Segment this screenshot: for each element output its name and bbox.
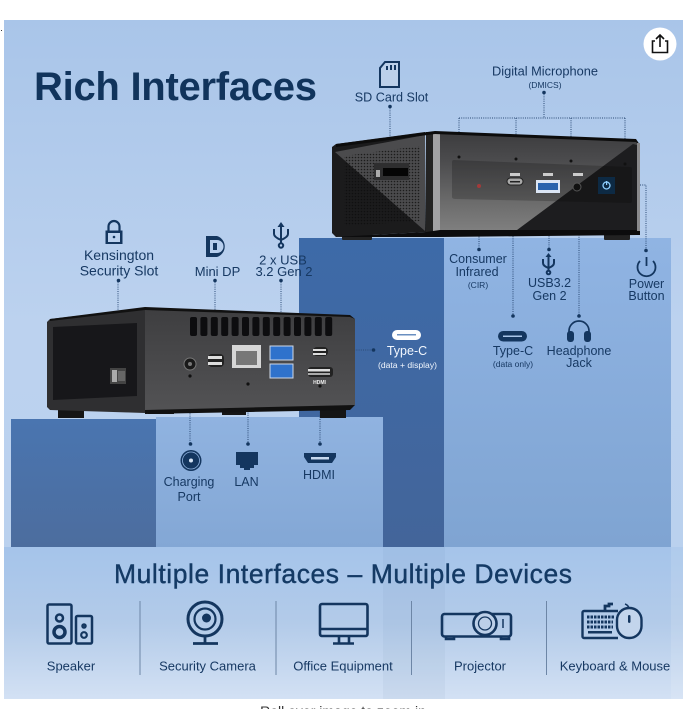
icon: security camera xyxy=(188,602,222,644)
label: Power Button: Power xyxy=(629,277,664,291)
stray mark xyxy=(1,30,2,31)
lower device ports xyxy=(184,345,333,388)
lower device top edge xyxy=(50,307,355,321)
icon: Type-C data and display xyxy=(330,330,421,352)
lower device rear face xyxy=(145,308,355,412)
icon: projector xyxy=(442,612,511,639)
label: Power Button: Button xyxy=(628,289,665,303)
icon: LAN xyxy=(236,442,258,470)
lower device left face xyxy=(47,308,145,413)
top device bottom strip xyxy=(334,230,640,237)
label: HDMI: HDMI xyxy=(303,468,335,482)
top device top edge xyxy=(336,131,640,147)
label: USB3.2 Gen 2: Gen 2 xyxy=(532,289,567,303)
top device corner dark strip xyxy=(426,132,434,236)
icon: SD card xyxy=(380,62,399,87)
top device ports xyxy=(458,156,626,194)
label: Power Button xyxy=(628,277,665,303)
top device front face xyxy=(440,132,640,230)
label: Consumer Infrared: Infrared xyxy=(455,265,499,279)
lower device bottom strip xyxy=(145,405,355,414)
left pedestal light face xyxy=(156,417,383,547)
label: Type-C data only: (data only) xyxy=(493,359,533,369)
top device left face highlight xyxy=(335,135,425,231)
label: Keyboard and Mouse: Keyboard & Mouse xyxy=(560,658,670,674)
icon: USB xyxy=(274,222,288,248)
top device left face xyxy=(332,132,426,237)
label: USB3.2 Gen 2 xyxy=(528,276,571,303)
label: Headphone Jack: Headphone xyxy=(547,344,611,358)
label: Headphone Jack xyxy=(547,344,611,370)
title: Rich Interfaces xyxy=(34,65,317,109)
label: Office Equipment: Office Equipment xyxy=(293,658,393,674)
top device port panel xyxy=(452,160,632,203)
right pedestal dark face xyxy=(299,238,444,547)
SD slot xyxy=(374,163,409,180)
band side strip xyxy=(671,547,683,699)
icon: monitor xyxy=(320,604,368,644)
bottom band xyxy=(4,547,683,699)
top device dark diagonal xyxy=(517,144,640,230)
label: Type-C data only: Type-C xyxy=(493,344,533,358)
label: Charging Port: Charging xyxy=(164,475,214,489)
label: USB3.2 Gen 2: USB3.2 xyxy=(528,276,571,290)
icon: HDMI xyxy=(304,442,336,463)
label: Consumer Infrared xyxy=(449,248,507,290)
left pedestal dark face xyxy=(11,419,156,547)
label: Charging Port xyxy=(164,475,214,504)
device: lower mini PC xyxy=(47,307,355,418)
bottom heading: Multiple Interfaces – Multiple Devices xyxy=(114,559,572,589)
label: Consumer Infrared: (CIR) xyxy=(468,280,488,290)
device dividers xyxy=(140,601,546,675)
label: Security Camera: Security Camera xyxy=(159,658,257,674)
top device feet xyxy=(342,234,630,240)
label: 2 x USB 3.2 Gen 2: 3.2 Gen 2 xyxy=(255,264,313,279)
icon: Type-C data only xyxy=(498,314,527,342)
label: LAN: LAN xyxy=(234,475,259,489)
label: 2 x USB 3.2 Gen 2 xyxy=(255,252,313,282)
label: Digital Microphone: Digital Microphone xyxy=(492,64,598,78)
label: Kensington Security Slot: Security Slot xyxy=(80,262,158,278)
label: Charging Port: Port xyxy=(178,490,201,504)
top device right rim xyxy=(637,143,640,231)
lower device vents xyxy=(190,317,332,336)
label: Consumer Infrared: Consumer xyxy=(449,252,507,266)
icon: USB 3.2 xyxy=(543,248,554,274)
label: Digital Microphone xyxy=(492,64,598,94)
label: SD Card Slot: SD Card Slot xyxy=(355,90,429,104)
label: Projector: Projector xyxy=(454,658,507,674)
label: Headphone Jack: Jack xyxy=(566,356,593,370)
label: Kensington Security Slot: Kensington xyxy=(84,247,154,263)
label: 2 x USB 3.2 Gen 2: 2 x USB xyxy=(259,252,307,268)
lower device latch xyxy=(110,368,126,384)
label: Speaker: Speaker xyxy=(47,658,96,674)
label: Type-C data and display: Type-C xyxy=(387,344,427,358)
lower device left panel xyxy=(53,323,137,400)
callout lines for lower device xyxy=(118,280,320,444)
label: Digital Microphone: (DMICS) xyxy=(528,80,562,90)
icon: charging port xyxy=(180,442,202,471)
icon: headphones xyxy=(567,314,591,342)
band overlap tone xyxy=(383,547,445,699)
label: Mini DP: Mini DP xyxy=(195,264,240,279)
lower device ports: HDMI xyxy=(313,380,326,386)
top device silver pillar xyxy=(433,132,440,235)
right pedestal light face xyxy=(444,238,671,547)
icon: power xyxy=(638,249,656,276)
icon: keyboard and mouse xyxy=(582,604,642,638)
icon: Kensington lock xyxy=(106,221,122,244)
icon: speaker xyxy=(48,604,92,644)
device: top mini PC xyxy=(332,131,640,240)
share button xyxy=(644,28,676,60)
lower device feet xyxy=(58,406,346,418)
callout lines for top device xyxy=(390,92,646,316)
label: Type-C data and display xyxy=(378,344,437,370)
top device mesh xyxy=(344,146,420,226)
label: Kensington Security Slot xyxy=(80,247,158,282)
dot: SD callout xyxy=(388,105,392,108)
label: Type-C data only xyxy=(493,344,533,369)
label: Type-C data and display: (data + display) xyxy=(378,360,437,370)
icon: Mini DP xyxy=(206,236,225,257)
